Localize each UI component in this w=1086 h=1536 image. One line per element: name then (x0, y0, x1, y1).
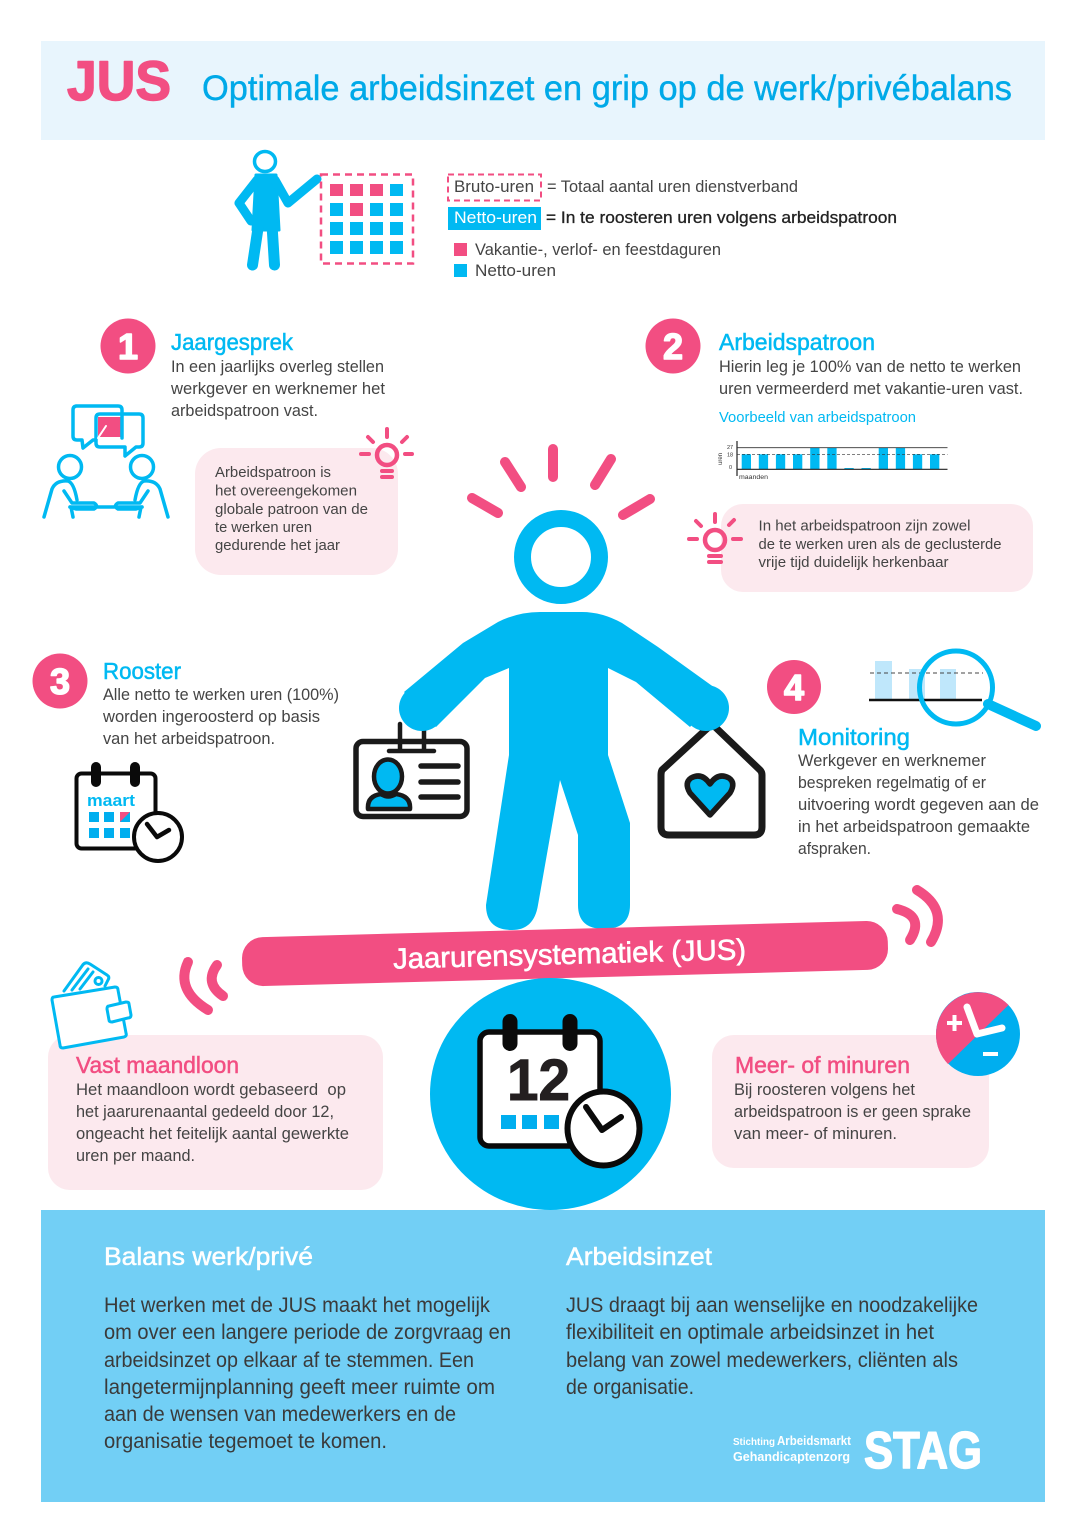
panel: Meer- of minuren: van meer- of minuren. (734, 1125, 897, 1143)
icon: wallet (52, 963, 131, 1048)
callout: work pattern recognisable: vrije tijd duidelijk herkenbaar (758, 555, 949, 571)
legend: = Totaal aantal uren dienstverband (547, 178, 798, 196)
panel: Vast maandloon: ongeacht het feitelijk aantal gewerkte (76, 1125, 349, 1143)
icon: plus-minus clock (936, 992, 1020, 1076)
text block: Balans werk/privé: Balans werk/privé (104, 1243, 313, 1271)
icon: conversation (44, 406, 168, 517)
text block: Balans werk/privé: langetermijnplanning geeft meer ruimte om (104, 1376, 495, 1399)
section 1: Jaargesprek: Jaargesprek (171, 329, 293, 355)
section 3: Rooster: Alle netto te werken uren (100%) (103, 686, 339, 704)
icon: lightbulb 1 (361, 429, 412, 477)
icon: ID badge (356, 724, 467, 816)
section 4: Monitoring: in het arbeidspatroon gemaakte (798, 818, 1030, 836)
icon: magnifier over chart (869, 651, 1036, 726)
icon: small person pointing (239, 152, 317, 265)
section 2: Arbeidspatroon (646, 318, 1023, 426)
panel: Vast maandloon: het jaarurenaantal gedeeld door 12, (76, 1103, 334, 1121)
illustration: central person (399, 518, 729, 930)
panel: Meer- of minuren (712, 1035, 989, 1168)
legend: Netto-uren (475, 262, 556, 280)
chart: example work pattern: 18 (727, 452, 733, 458)
section 4: Monitoring: Monitoring (798, 724, 910, 750)
panel: header (41, 41, 1045, 140)
section 3: Rooster: 3 (50, 661, 70, 702)
panel: Meer- of minuren: arbeidspatroon is er geen sprake (734, 1103, 971, 1121)
text block: Arbeidsinzet (566, 1243, 978, 1399)
icon: lightbulb 2 (689, 514, 741, 562)
panel: Vast maandloon: Vast maandloon (76, 1052, 239, 1078)
logo: STAG: Stichting (733, 1437, 775, 1448)
text block: Balans werk/privé: arbeidsinzet op elkaar af te stemmen. Een (104, 1349, 474, 1372)
section 3: Rooster: worden ingeroosterd op basis (102, 708, 320, 726)
text block: Arbeidsinzet: Arbeidsinzet (566, 1243, 712, 1271)
panel: Vast maandloon: uren per maand. (76, 1147, 195, 1165)
section 2: Arbeidspatroon: uren vermeerderd met vakantie-uren vast. (719, 380, 1023, 398)
text block: Balans werk/privé: aan de wensen van medewerkers en de (104, 1403, 456, 1426)
legend: Bruto-uren (454, 178, 534, 196)
icon: waves left (184, 962, 223, 1010)
section 3: Rooster: van het arbeidspatroon. (103, 730, 275, 748)
logo: STAG (733, 1422, 982, 1480)
text block: Arbeidsinzet: belang van zowel medewerkers, cliënten als (566, 1349, 958, 1372)
section 4: Monitoring (767, 660, 1039, 858)
icon: big blue circle with calendar (430, 978, 671, 1210)
callout: Arbeidspatroon definition (195, 448, 398, 575)
icon: house with heart (661, 724, 762, 835)
callout: work pattern recognisable: In het arbeidspatroon zijn zowel (758, 519, 970, 535)
callout: Arbeidspatroon definition: Arbeidspatroon is (215, 465, 331, 481)
section 2: Arbeidspatroon: Hierin leg je 100% van de netto te werken (719, 358, 1021, 376)
callout: work pattern recognisable (721, 504, 1033, 592)
logo: STAG: Gehandicaptenzorg (733, 1450, 850, 1464)
legend (448, 174, 897, 280)
chart: example work pattern: 27 (727, 445, 733, 451)
panel: Vast maandloon (48, 1035, 383, 1190)
chart: example work pattern: maanden (739, 474, 768, 481)
section 2: Arbeidspatroon: 2 (663, 326, 683, 367)
text block: Balans werk/privé: Het werken met de JUS maakt het mogelijk (104, 1294, 490, 1317)
section 1: Jaargesprek: In een jaarlijks overleg stellen (171, 358, 384, 376)
legend: Netto-uren (454, 209, 537, 227)
logo: STAG: STAG (864, 1422, 982, 1480)
section 1: Jaargesprek: arbeidspatroon vast. (171, 402, 318, 420)
text block: Arbeidsinzet: flexibiliteit en optimale arbeidsinzet in het (566, 1321, 934, 1344)
section 2: Arbeidspatroon: Arbeidspatroon (719, 329, 875, 355)
section 4: Monitoring: afspraken. (798, 840, 871, 858)
text block: Balans werk/privé: organisatie tegemoet te komen. (104, 1430, 387, 1453)
section 2: Arbeidspatroon: Voorbeeld van arbeidspatroon (719, 409, 916, 426)
callout: Arbeidspatroon definition: te werken uren (215, 520, 312, 536)
legend: = In te roosteren uren volgens arbeidspatroon (546, 209, 897, 227)
banner: Jaarurensystematiek: Jaarurensystematiek (JUS) (393, 934, 746, 976)
callout: Arbeidspatroon definition: gedurende het jaar (215, 538, 340, 554)
icon: calendar maart with clock: maart (87, 791, 135, 810)
logo: STAG: Arbeidsmarkt (777, 1434, 852, 1448)
icon: calendar maart with clock (76, 762, 182, 861)
banner: Jaarurensystematiek (241, 920, 889, 987)
callout: Arbeidspatroon definition: globale patroon van de (215, 502, 368, 518)
text block: Arbeidsinzet: JUS draagt bij aan wenselijke en noodzakelijke (566, 1294, 978, 1317)
icon: waves right (897, 890, 938, 942)
icon: idea rays (472, 449, 650, 515)
section 3: Rooster: Rooster (103, 658, 181, 684)
text block: Balans werk/privé (104, 1243, 511, 1453)
section 4: Monitoring: uitvoering wordt gegeven aan de (798, 796, 1039, 814)
section 4: Monitoring: Werkgever en werknemer (798, 752, 986, 770)
section 1: Jaargesprek: werkgever en werknemer het (170, 380, 385, 398)
title: JUS: JUS (67, 49, 171, 112)
callout: Arbeidspatroon definition: het overeengekomen (215, 484, 357, 500)
legend: Vakantie-, verlof- en feestdaguren (475, 241, 721, 259)
callout: work pattern recognisable: de te werken uren als de geclusterde (758, 537, 1002, 553)
section 1: Jaargesprek: 1 (118, 326, 138, 367)
panel: Meer- of minuren: Meer- of minuren (735, 1052, 910, 1078)
icon: hours grid (321, 174, 413, 264)
heading: subtitle: Optimale arbeidsinzet en grip op de werk/privébalans (202, 69, 1012, 108)
panel: Meer- of minuren: Bij roosteren volgens het (734, 1081, 915, 1099)
icon: big blue circle with calendar: 12 (507, 1048, 570, 1113)
section 4: Monitoring: 4 (784, 667, 804, 708)
chart: example work pattern: 0 (729, 465, 732, 471)
panel: bottom blue (41, 1210, 1045, 1502)
section 1: Jaargesprek (100, 318, 385, 420)
chart: example work pattern: uren (718, 453, 724, 465)
panel: Vast maandloon: Het maandloon wordt gebaseerd op (76, 1081, 346, 1099)
section 3: Rooster (32, 654, 339, 748)
text block: Arbeidsinzet: de organisatie. (566, 1376, 694, 1399)
chart: example work pattern (718, 441, 948, 481)
text block: Balans werk/privé: om over een langere periode de zorgvraag en (104, 1321, 511, 1344)
section 4: Monitoring: bespreken regelmatig of er (798, 774, 986, 792)
